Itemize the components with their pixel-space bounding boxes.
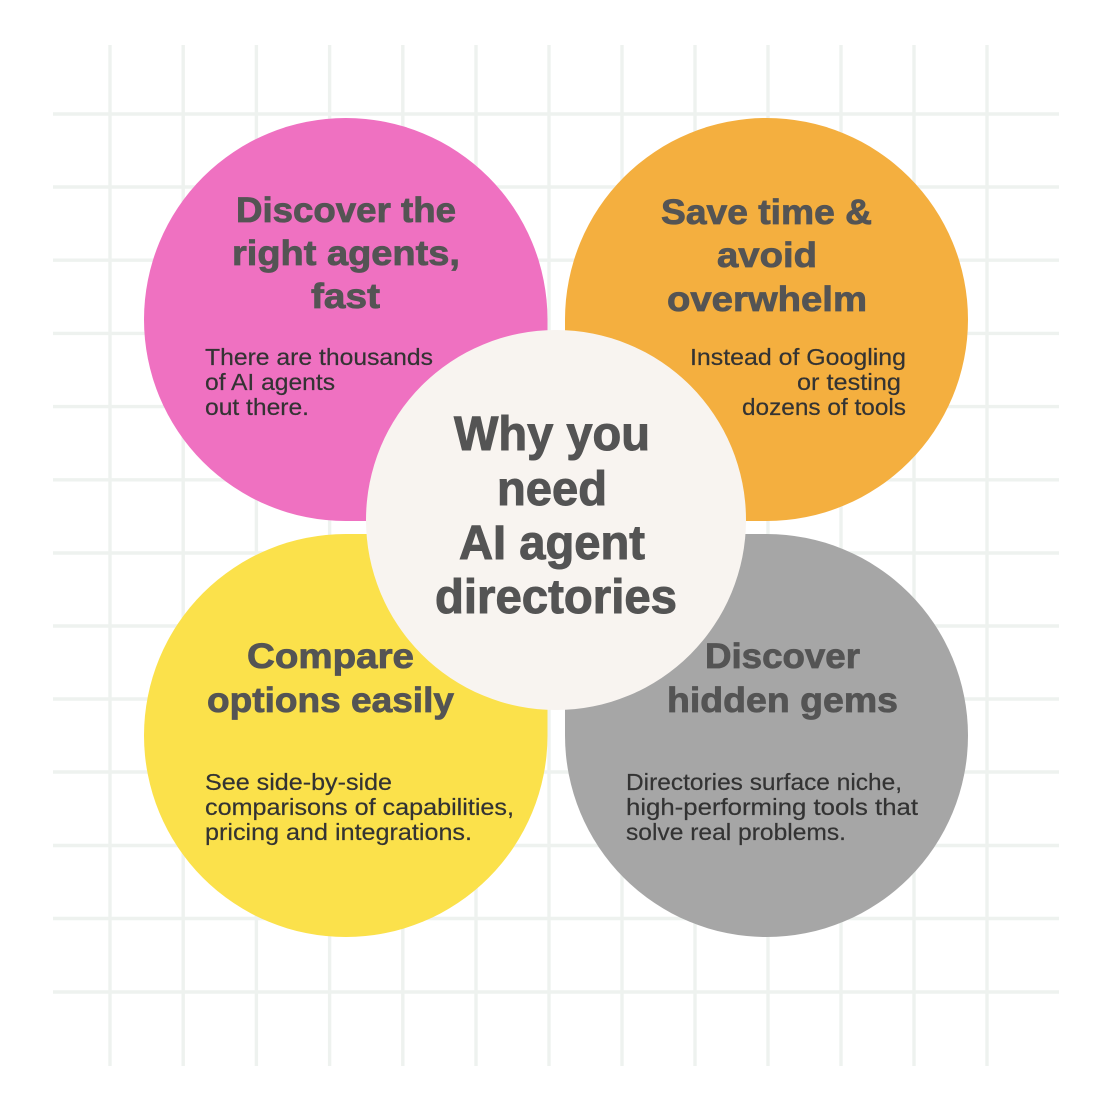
heading: discover the right agents, fast: [232, 191, 460, 316]
body text: side-by-side comparisons: comparisons of capabilities,: [205, 794, 514, 820]
heading: save time and avoid overwhelm: Save time &: [661, 193, 872, 232]
body text: instead of googling: dozens of tools: [742, 394, 906, 420]
center hub: [366, 330, 746, 710]
heading: save time and avoid overwhelm: avoid: [717, 236, 817, 275]
heading: save time and avoid overwhelm: [661, 193, 872, 319]
body text: thousands of agents: of AI agents: [205, 369, 335, 395]
title: AI agent: [459, 517, 645, 570]
pink petal shape: [144, 118, 548, 521]
body text: niche tools: [626, 769, 919, 845]
title: Why you: [454, 408, 650, 461]
panel: discover hidden gems: [565, 534, 968, 937]
title: directories: [435, 571, 677, 624]
heading: discover hidden gems: hidden gems: [667, 681, 898, 720]
panel: discover the right agents: [144, 118, 548, 521]
body text: thousands of agents: [205, 344, 433, 420]
panel: save time and avoid overwhelm: [565, 118, 968, 521]
body text: instead of googling: [690, 344, 906, 420]
body text: instead of googling: or testing: [797, 369, 901, 395]
heading: save time and avoid overwhelm: overwhelm: [667, 280, 867, 319]
heading: discover the right agents, fast: right agents,: [232, 234, 460, 273]
heading: compare options easily: Compare: [247, 637, 414, 676]
heading: discover hidden gems: [667, 637, 898, 720]
body text: side-by-side comparisons: See side-by-side: [205, 769, 392, 795]
heading: compare options easily: options easily: [207, 681, 455, 720]
heading: discover the right agents, fast: fast: [311, 277, 380, 316]
center circle: [366, 330, 746, 710]
body text: niche tools: Directories surface niche,: [626, 769, 902, 795]
heading: discover hidden gems: Discover: [705, 637, 860, 676]
body text: side-by-side comparisons: [205, 769, 514, 845]
heading: compare options easily: [207, 637, 455, 720]
orange petal shape: [565, 118, 968, 521]
body text: instead of googling: Instead of Googling: [690, 344, 906, 370]
body text: side-by-side comparisons: pricing and integrations.: [205, 819, 472, 845]
body text: niche tools: high-performing tools that: [626, 794, 919, 820]
heading: discover the right agents, fast: Discover the: [236, 191, 456, 230]
title: [435, 408, 677, 624]
gray petal shape: [565, 534, 968, 937]
body text: niche tools: solve real problems.: [626, 819, 846, 845]
body text: thousands of agents: out there.: [205, 394, 309, 420]
yellow petal shape: [144, 534, 548, 937]
title: need: [497, 463, 607, 516]
body text: thousands of agents: There are thousands: [205, 344, 433, 370]
panel: compare options easily: [144, 534, 548, 937]
